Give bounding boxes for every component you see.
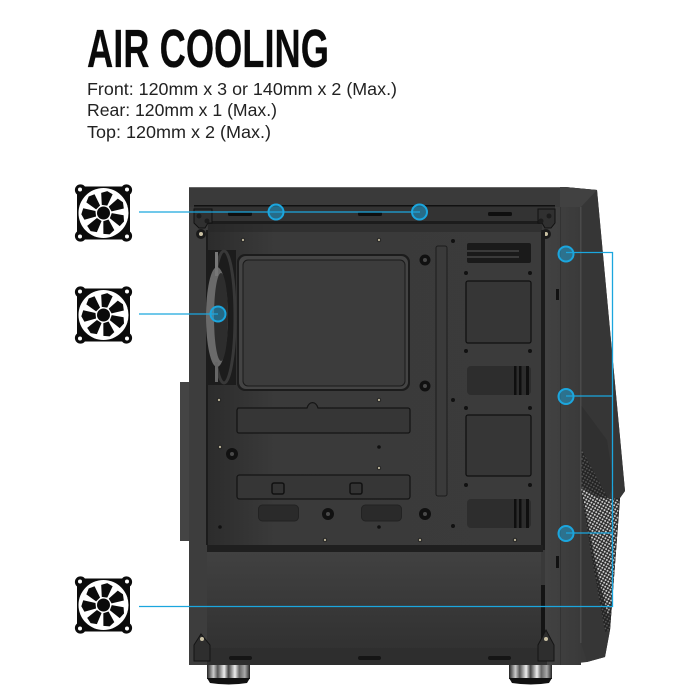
motherboard cutout — [237, 254, 410, 391]
drive plates and openings — [466, 281, 531, 528]
fan icon: front — [75, 576, 132, 634]
left frame — [189, 207, 207, 665]
rear fan — [206, 250, 236, 385]
top rail — [194, 205, 555, 239]
callout markers — [210, 204, 574, 541]
front panel strip — [545, 207, 581, 665]
front mesh — [581, 405, 620, 632]
tray bar lower — [237, 475, 410, 499]
top vent — [467, 243, 531, 263]
specifications text: Rear: 120mm x 1 (Max.) — [87, 100, 277, 120]
vertical tray rib — [436, 246, 447, 496]
title: AIR COOLING — [87, 19, 329, 79]
specifications text: Top: 120mm x 2 (Max.) — [87, 122, 271, 142]
tray bar upper — [237, 403, 410, 433]
specifications text: Front: 120mm x 3 or 140mm x 2 (Max.) — [87, 79, 397, 99]
fan icon: top — [75, 184, 132, 242]
bottom rail — [194, 630, 554, 665]
power supply shroud — [207, 545, 545, 650]
side rear panel — [180, 382, 190, 541]
fan icon: rear — [75, 286, 132, 344]
front bezel — [565, 187, 625, 662]
specifications text — [87, 79, 397, 142]
feet — [207, 665, 552, 684]
case silhouette — [189, 187, 625, 665]
tray slots — [258, 505, 402, 521]
front corner facet — [560, 187, 597, 208]
computer case — [180, 187, 625, 684]
top panel — [189, 187, 560, 207]
callout lines — [139, 212, 612, 606]
motherboard tray — [208, 224, 542, 545]
grommet holes and screws — [217, 238, 532, 542]
